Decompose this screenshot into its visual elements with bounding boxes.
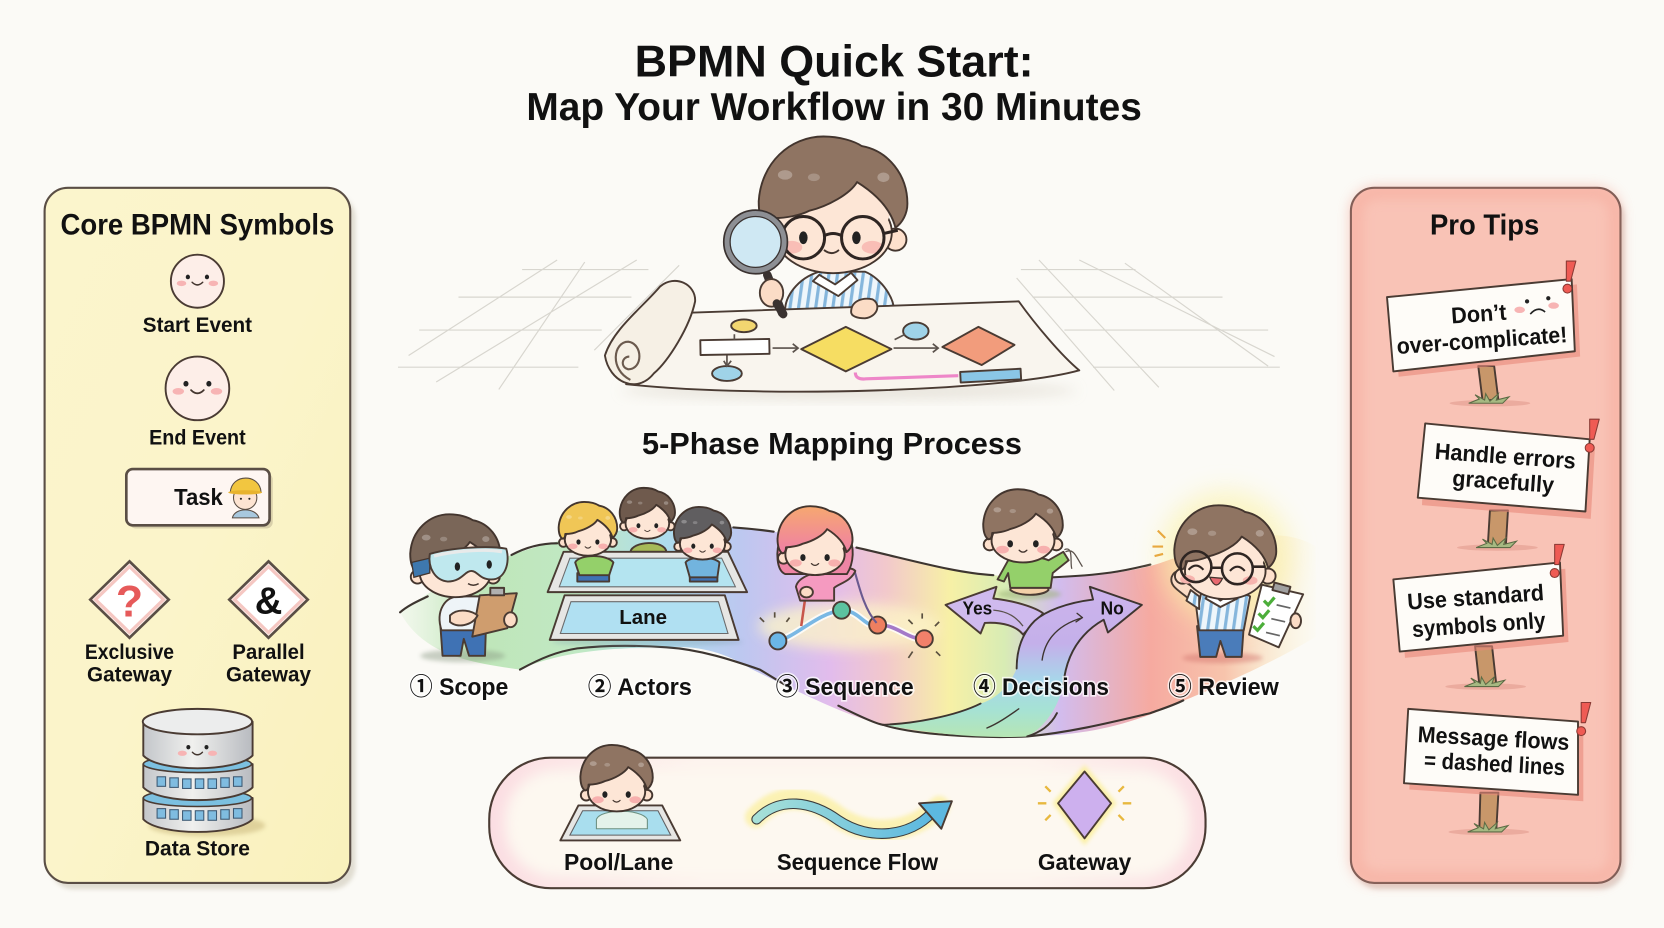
tip sign 3 bbox=[1393, 544, 1568, 690]
Yes arrow bbox=[946, 587, 1043, 635]
start event: Start Event bbox=[143, 314, 252, 337]
pool bbox=[548, 552, 747, 592]
data store: Data Store bbox=[145, 837, 250, 860]
phase 5: Review bbox=[1152, 491, 1303, 663]
tip sign 4 bbox=[1404, 702, 1591, 835]
title: Map Your Workflow in 30 Minutes bbox=[526, 85, 1142, 129]
end event bbox=[149, 357, 246, 450]
decision character bbox=[983, 489, 1082, 595]
worried face bbox=[1514, 296, 1559, 314]
panel: core BPMN symbols bbox=[45, 188, 356, 889]
phase labels: ② Actors bbox=[588, 674, 692, 701]
tip sign 2: gracefully bbox=[1452, 465, 1555, 498]
phase labels: ⑤ Review bbox=[1168, 674, 1280, 701]
round glasses bbox=[782, 216, 898, 259]
unrolled paper map bbox=[626, 301, 1079, 392]
phase labels: ④ Decisions bbox=[973, 674, 1109, 701]
tip sign 2: Handle errors bbox=[1434, 438, 1577, 474]
exclusive gateway: ? bbox=[116, 578, 143, 627]
panel heading: Core BPMN Symbols bbox=[61, 209, 334, 242]
legend: gateway bbox=[1038, 771, 1131, 875]
phase 3: Sequence bbox=[759, 506, 940, 658]
alert mark bbox=[1585, 419, 1599, 452]
flowchart on paper bbox=[700, 319, 1021, 383]
face details bbox=[781, 231, 883, 254]
legend bar bbox=[489, 745, 1206, 888]
phase 1: Scope bbox=[410, 514, 517, 662]
No arrow and fork stem bbox=[883, 587, 1142, 737]
title: BPMN Quick Start: bbox=[635, 37, 1034, 86]
dark-haired actor bbox=[674, 507, 731, 582]
end event: End Event bbox=[149, 427, 246, 450]
magnifying glass bbox=[724, 210, 787, 314]
tip sign 4: Message flows bbox=[1417, 721, 1570, 755]
tip sign 1 bbox=[1387, 261, 1580, 406]
alert mark bbox=[1550, 544, 1564, 577]
goggles bbox=[412, 547, 508, 585]
phase 4: Decisions bbox=[883, 489, 1142, 737]
task bbox=[126, 469, 273, 528]
No arrow and fork stem: No bbox=[1100, 598, 1124, 618]
phase labels bbox=[410, 674, 1280, 701]
exclusive gateway: Exclusive bbox=[85, 641, 174, 664]
panel heading: Pro Tips bbox=[1430, 210, 1539, 242]
parallel gateway bbox=[226, 561, 311, 686]
task: Task bbox=[174, 484, 223, 510]
title bbox=[526, 37, 1142, 129]
data store bbox=[143, 709, 265, 860]
icon: worker bbox=[228, 478, 262, 518]
laughing eyes and round glasses bbox=[1180, 551, 1265, 585]
parallel gateway: Gateway bbox=[226, 663, 311, 686]
alert mark bbox=[1563, 261, 1576, 293]
tip sign 3: Use standard bbox=[1406, 579, 1545, 615]
lane: Lane bbox=[619, 607, 667, 629]
parallel gateway: & bbox=[255, 579, 282, 622]
tip sign 4: = dashed lines bbox=[1423, 747, 1566, 780]
legend: gateway: Gateway bbox=[1038, 849, 1131, 875]
phase 2: Actors with pool and lanes bbox=[548, 488, 747, 646]
tip sign 3: symbols only bbox=[1411, 607, 1547, 642]
clipboard bbox=[472, 588, 517, 637]
girl with string bbox=[777, 506, 877, 626]
tip sign 2 bbox=[1418, 419, 1599, 551]
brown actor bbox=[620, 488, 675, 552]
legend: pool/lane bbox=[560, 745, 680, 875]
start event bbox=[143, 255, 252, 337]
checklist bbox=[1249, 583, 1303, 647]
analyst head bbox=[759, 137, 907, 273]
blonde actor bbox=[559, 502, 617, 582]
panel: pro tips bbox=[1351, 188, 1625, 889]
parallel gateway: Parallel bbox=[232, 641, 305, 664]
main illustration: analyst with magnifier and process map bbox=[605, 137, 1079, 400]
tip sign 1: Don’t bbox=[1450, 299, 1508, 328]
sequence path bbox=[760, 602, 940, 658]
analyst body bbox=[785, 272, 894, 315]
phase labels: ③ Sequence bbox=[776, 674, 914, 701]
lane bbox=[550, 595, 739, 640]
legend: sequence flow bbox=[756, 799, 952, 875]
legend: pool/lane: Pool/Lane bbox=[564, 849, 673, 875]
exclusive gateway: Gateway bbox=[87, 663, 172, 686]
paper roll bbox=[605, 281, 695, 384]
legend: sequence flow: Sequence Flow bbox=[777, 849, 939, 875]
Yes arrow: Yes bbox=[963, 598, 992, 618]
phase labels: ① Scope bbox=[410, 674, 508, 701]
analyst right hand bbox=[851, 299, 877, 318]
alert mark bbox=[1577, 702, 1591, 736]
tip sign 1: over-complicate! bbox=[1396, 321, 1568, 359]
exclusive gateway bbox=[85, 561, 174, 686]
section heading: 5-Phase Mapping Process bbox=[642, 426, 1022, 461]
process river band bbox=[400, 526, 1316, 737]
